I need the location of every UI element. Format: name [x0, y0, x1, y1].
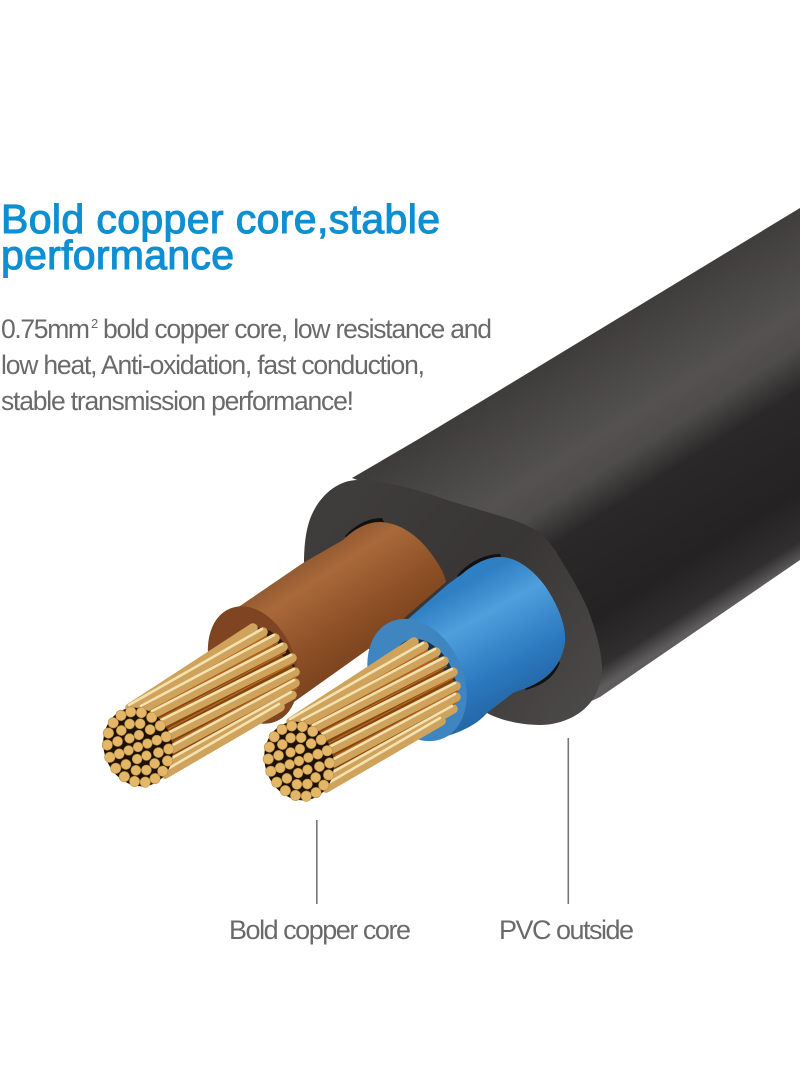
description text: 0.75mm	[1, 314, 90, 344]
label: Bold copper core: Bold copper core	[229, 915, 411, 945]
copper conductor left	[91, 625, 298, 797]
blue jacket opening	[379, 628, 469, 732]
brown wire jacket	[191, 518, 446, 737]
description text: low heat, Anti-oxidation, fast conduction,	[1, 350, 425, 380]
blue jacket body	[407, 557, 565, 740]
title	[1, 196, 440, 278]
title: performance	[1, 232, 234, 278]
copper conductor right	[252, 639, 459, 811]
title: Bold copper core,stable	[1, 196, 440, 242]
callout line: PVC	[568, 738, 569, 904]
callout line: copper core	[316, 820, 318, 904]
description text: 2	[91, 316, 98, 331]
black PVC sheath body	[352, 208, 800, 725]
brown jacket opening	[219, 617, 307, 719]
label: PVC outside: PVC outside	[499, 915, 634, 945]
blue socket shadows	[457, 554, 560, 690]
description text	[1, 314, 492, 416]
blue wire jacket	[348, 554, 565, 757]
brown jacket end ring	[191, 593, 315, 737]
description text: bold copper core, low resistance and	[103, 314, 492, 344]
brown socket shadow	[345, 518, 386, 545]
description text: stable transmission performance!	[1, 386, 354, 416]
blue jacket end ring	[348, 603, 486, 757]
brown jacket body	[237, 522, 446, 724]
cable illustration	[91, 208, 800, 811]
sheath end face	[304, 480, 602, 725]
